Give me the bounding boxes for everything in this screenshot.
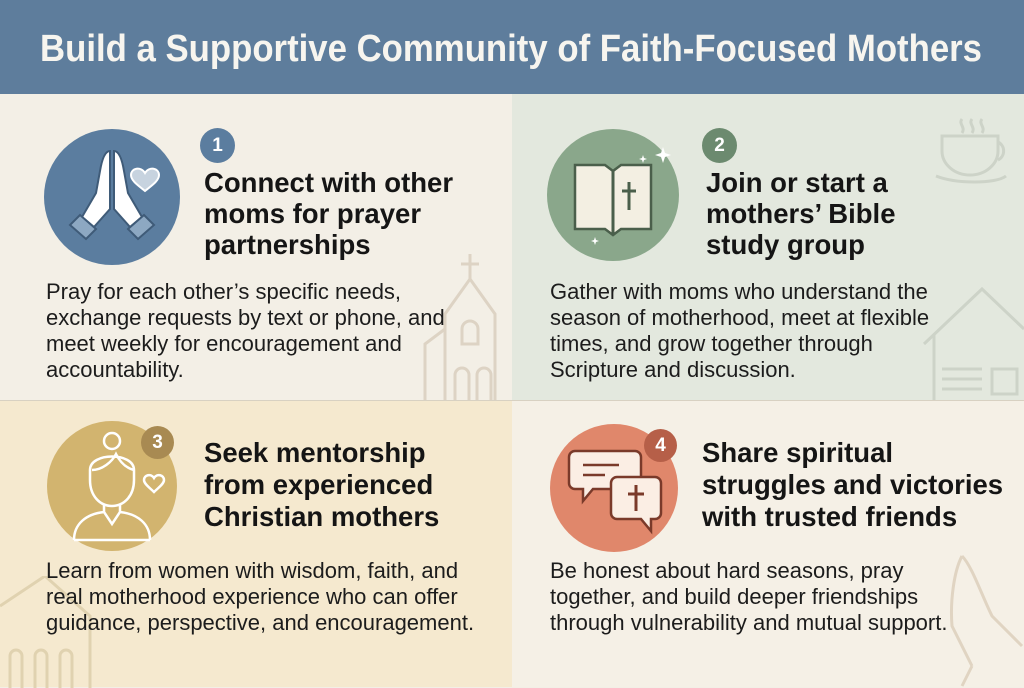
body text: meet weekly for encouragement and xyxy=(46,331,402,356)
body text xyxy=(46,558,474,635)
badge 3: 3 xyxy=(152,432,163,453)
heading: with trusted friends xyxy=(702,501,957,532)
body text: Learn from women with wisdom, faith, and xyxy=(46,558,458,583)
body text: exchange requests by text or phone, and xyxy=(46,305,445,330)
body text: together, and build deeper friendships xyxy=(550,584,918,609)
heading xyxy=(702,437,1003,532)
body text: times, and grow together through xyxy=(550,331,873,356)
body text: accountability. xyxy=(46,357,184,382)
icon: woman mentor circle xyxy=(47,421,177,551)
badge 4: 4 xyxy=(655,435,666,456)
heading: mothers’ Bible xyxy=(706,198,896,229)
body text: Gather with moms who understand the xyxy=(550,279,928,304)
header banner xyxy=(0,0,1024,94)
body text: Be honest about hard seasons, pray xyxy=(550,558,903,583)
badge 2: 2 xyxy=(714,135,725,156)
panel: share struggles xyxy=(512,400,1024,687)
body text: season of motherhood, meet at flexible xyxy=(550,305,929,330)
panel: prayer partnerships xyxy=(0,94,512,400)
body text xyxy=(550,279,929,382)
panel: mentorship xyxy=(0,400,512,687)
badge 2 xyxy=(702,128,737,163)
body text: Scripture and discussion. xyxy=(550,357,796,382)
heading: Join or start a xyxy=(706,167,888,198)
badge 4 xyxy=(644,429,677,462)
icon: coffee cup xyxy=(936,118,1007,184)
heading: Share spiritual xyxy=(702,437,893,468)
body text: through vulnerability and mutual support. xyxy=(550,610,947,635)
heading: from experienced xyxy=(204,469,433,500)
icon: open Bible circle xyxy=(547,129,679,261)
badge 1: 1 xyxy=(212,135,223,156)
heading: Seek mentorship xyxy=(204,437,426,468)
badge 3 xyxy=(141,426,174,459)
icon: church outline xyxy=(424,254,496,400)
heading xyxy=(706,167,896,260)
icon: praying hands circle xyxy=(44,129,180,265)
icon: speech bubbles circle xyxy=(550,424,678,552)
heading: Connect with other xyxy=(204,167,453,198)
icon: chapel outline xyxy=(0,576,92,688)
heading: struggles and victories xyxy=(702,469,1003,500)
icon: praying hands outline xyxy=(950,555,1023,686)
body text xyxy=(46,279,445,382)
body text: Pray for each other’s specific needs, xyxy=(46,279,401,304)
heading xyxy=(204,167,453,260)
heading: Christian mothers xyxy=(204,501,439,532)
body text: guidance, perspective, and encouragement. xyxy=(46,610,474,635)
panel: Bible study xyxy=(512,94,1024,400)
body text: real motherhood experience who can offer xyxy=(46,584,458,609)
heading xyxy=(204,437,439,532)
heading: study group xyxy=(706,229,865,260)
body text xyxy=(550,558,947,635)
badge 1 xyxy=(200,128,235,163)
heading: moms for prayer xyxy=(204,198,421,229)
heading: partnerships xyxy=(204,229,371,260)
icon: house outline xyxy=(923,287,1024,400)
